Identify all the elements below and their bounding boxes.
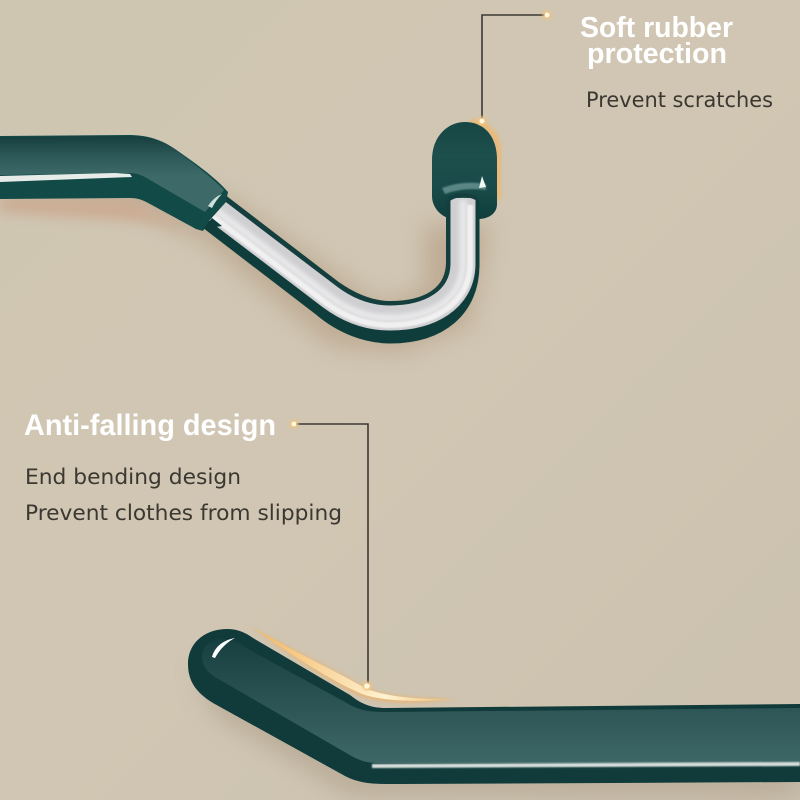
text: prevent scratches: Prevent scratches (586, 88, 773, 112)
heading: soft rubber protection: protection (587, 38, 727, 70)
lower bar glossy face (202, 639, 800, 763)
rubber bar upper face (0, 136, 224, 212)
rubber tip glow (470, 122, 498, 200)
text: prevent clothes from slipping: Prevent clothes from slipping (25, 501, 342, 525)
leader dot on hanger (362, 681, 372, 691)
callout: anti-falling design (24, 409, 372, 691)
hanger top section: rubber bar, steel hook and rubber tip (0, 122, 498, 352)
lower bar reflection (372, 762, 800, 768)
warm shadow under bar (0, 199, 190, 232)
orange edge glow core (250, 626, 456, 701)
leader dot top (542, 10, 552, 20)
leader line bottom (294, 424, 368, 685)
leader dot on tip (477, 116, 487, 126)
rubber tip neck highlight (442, 183, 486, 194)
hanger bottom section: curved rubber end (188, 625, 800, 795)
steel stub collar (449, 195, 478, 199)
end-cap white glint (212, 638, 235, 658)
heading: soft rubber protection (580, 12, 733, 70)
lower hanger shadow (195, 665, 800, 795)
steel hook teal upper edge (216, 200, 458, 313)
orange edge glow blurred (248, 625, 456, 702)
shadow of upper hanger (0, 170, 490, 352)
rubber bar (0, 135, 228, 231)
leader line top (482, 15, 547, 122)
heading: soft rubber protection: Soft rubber (580, 12, 733, 44)
text: end bending design: End bending design (25, 465, 241, 489)
steel hook centre band (213, 200, 463, 318)
rubber bar reflection (0, 173, 132, 182)
steel hook teal backing (208, 200, 467, 331)
rubber tip (432, 122, 497, 219)
lower-bar edge over steel (203, 218, 222, 229)
steel hook bright band (208, 205, 470, 325)
lower bar dark shell (188, 629, 800, 784)
collar glint (208, 194, 222, 208)
steel hook chrome (213, 198, 463, 318)
heading: anti-falling design: Anti-falling design (24, 409, 276, 442)
rubber tip white glint (479, 176, 486, 188)
callout: soft rubber protection (477, 10, 773, 126)
leader dot heading (289, 419, 299, 429)
